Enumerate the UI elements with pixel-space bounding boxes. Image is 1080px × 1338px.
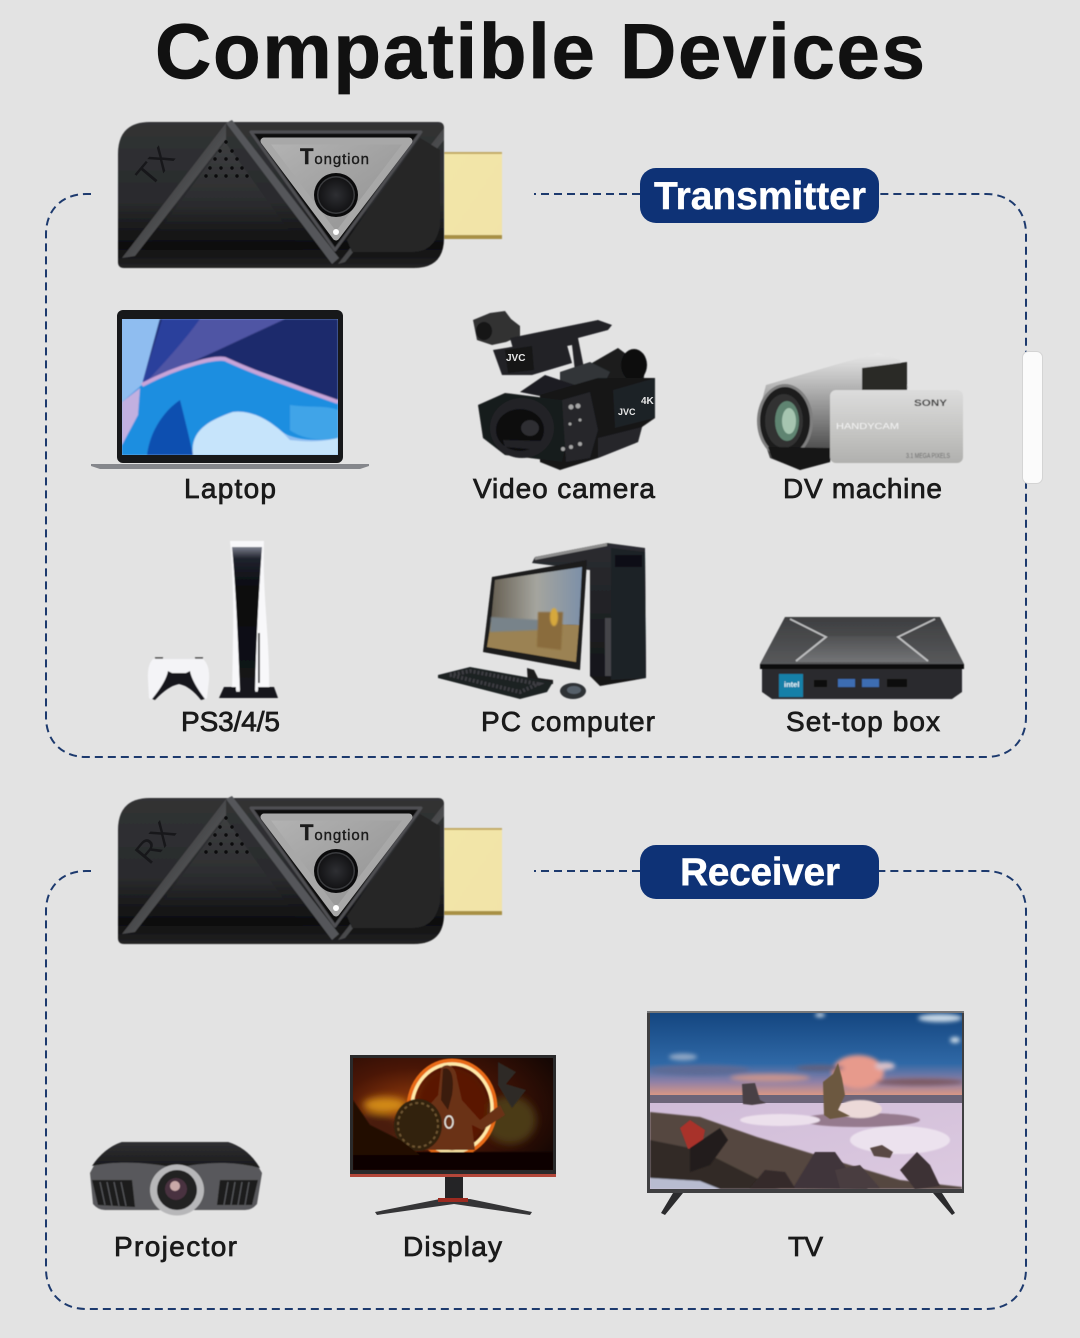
mic holder	[473, 311, 520, 345]
RX dongle	[118, 796, 502, 944]
dongle body	[118, 796, 444, 944]
device: PC computer	[438, 543, 646, 699]
handle	[510, 320, 612, 371]
device: set-top box	[760, 617, 964, 699]
device: DV machine	[757, 353, 963, 470]
keyboard	[438, 667, 553, 699]
TX mark: TX	[129, 140, 182, 193]
label: Transmitter	[640, 168, 879, 223]
monitor picture	[353, 1058, 553, 1170]
TV picture	[650, 1013, 962, 1189]
power button	[314, 173, 358, 217]
panel: transmitter dashed frame	[46, 194, 1026, 757]
title: Compatible Devices	[155, 7, 925, 95]
HDMI connector	[444, 152, 502, 239]
TX dongle	[118, 120, 502, 268]
caption: PS3/4/5: PS3/4/5	[181, 706, 280, 737]
device: laptop	[91, 310, 369, 469]
TV legs	[661, 1193, 955, 1215]
HDMI connector	[444, 828, 502, 915]
monitor stand	[527, 668, 553, 684]
device: video camera	[473, 311, 655, 470]
device: DV machine: HANDYCAM	[836, 422, 899, 431]
LED	[333, 905, 339, 911]
caption: DV machine: DV machine	[783, 473, 942, 504]
caption: PC computer: PC computer	[481, 706, 655, 737]
device: set-top box: intel	[784, 680, 799, 689]
camera brand marks	[506, 353, 655, 417]
LED	[333, 229, 339, 235]
label: Receiver: Receiver	[680, 851, 840, 894]
monitor frame	[350, 1055, 556, 1177]
device: PS5 console and controller	[148, 541, 278, 700]
caption: TV: TV	[788, 1231, 823, 1262]
device: projector	[90, 1142, 262, 1216]
scroll handle	[1022, 352, 1042, 484]
tower	[532, 543, 646, 686]
label: Transmitter: Transmitter	[654, 175, 866, 218]
caption: Projector: Projector	[114, 1231, 237, 1262]
side controls	[562, 392, 598, 462]
camera brand marks: JVC	[506, 353, 525, 364]
RX mark: RX	[128, 815, 183, 870]
LCD panel	[830, 390, 963, 463]
TV frame	[647, 1011, 964, 1193]
caption: Set-top box: Set-top box	[786, 706, 940, 737]
controller	[148, 658, 209, 700]
speaker dots	[204, 140, 249, 178]
device: display	[349, 1055, 556, 1215]
monitor	[483, 560, 587, 670]
camera brand marks: JVC	[618, 407, 636, 417]
label: Receiver	[640, 845, 879, 899]
monitor stand	[445, 1177, 463, 1200]
console	[219, 541, 278, 698]
main body	[540, 378, 655, 470]
camera brand marks: 4K	[641, 396, 655, 407]
silver panel	[264, 141, 409, 237]
device: TV	[647, 1011, 964, 1215]
speaker dots	[204, 816, 249, 854]
brand logo: Tongtion	[300, 144, 369, 169]
power button	[314, 849, 358, 893]
control box	[493, 338, 572, 375]
caption: Laptop: Laptop	[184, 473, 276, 504]
caption: Video camera: Video camera	[473, 473, 655, 504]
rear barrel and eyepiece	[592, 348, 645, 385]
lens hood	[478, 393, 568, 462]
dongle body	[118, 120, 444, 268]
caption: Display: Display	[403, 1231, 502, 1262]
panel: receiver dashed frame	[46, 871, 1026, 1309]
brand logo: Tongtion	[300, 820, 369, 845]
device: DV machine: 3.1 MEGA PIXELS	[906, 453, 950, 460]
mouse	[560, 683, 586, 699]
silver panel	[264, 817, 409, 913]
device: DV machine: SONY	[914, 398, 947, 408]
